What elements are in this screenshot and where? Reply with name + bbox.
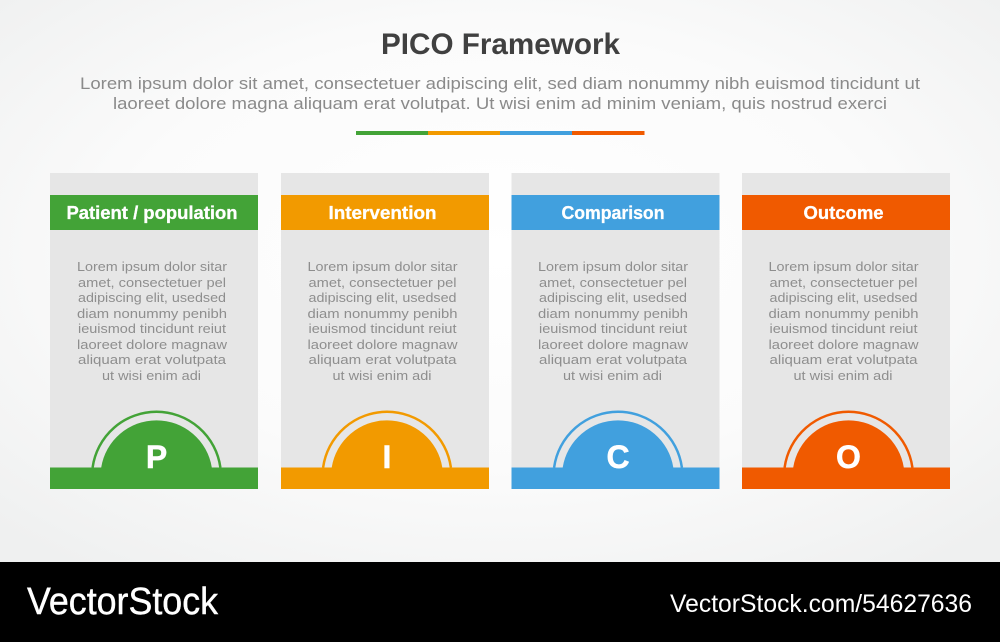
badge: O: O bbox=[836, 439, 861, 475]
panel: Comparison bbox=[512, 173, 720, 489]
body text: amet, consectetuer pel bbox=[308, 275, 457, 290]
header: Intervention bbox=[281, 195, 489, 230]
body text: ut wisi enim adi bbox=[102, 368, 201, 383]
body text: Lorem ipsum dolor sitar bbox=[308, 259, 458, 274]
header: Patient / population: Patient / population bbox=[66, 203, 238, 223]
badge: C bbox=[512, 412, 720, 489]
body text: ieuismod tincidunt reiut bbox=[308, 321, 457, 336]
title underline in four colours bbox=[356, 131, 644, 135]
body text: ut wisi enim adi bbox=[794, 368, 893, 383]
header: Comparison bbox=[512, 195, 720, 230]
body text: amet, consectetuer pel bbox=[539, 275, 687, 290]
body text: ieuismod tincidunt reiut bbox=[78, 321, 226, 336]
body text: adipiscing elit, usedsed bbox=[78, 290, 226, 305]
footer image id: VectorStock.com/54627636 bbox=[670, 590, 972, 618]
body text: diam nonummy penibh bbox=[538, 306, 688, 321]
body text: Lorem ipsum dolor sitar bbox=[538, 259, 689, 274]
body text: adipiscing elit, usedsed bbox=[539, 290, 687, 305]
body text: laoreet dolore magnaw bbox=[538, 337, 689, 352]
body text: amet, consectetuer pel bbox=[770, 275, 918, 290]
header: Outcome bbox=[742, 195, 950, 230]
badge: P: P bbox=[146, 439, 167, 475]
body text bbox=[77, 259, 228, 383]
body text bbox=[308, 259, 458, 383]
header: Comparison: Comparison bbox=[562, 203, 664, 223]
body text: ut wisi enim adi bbox=[332, 368, 432, 383]
subtitle text: Lorem ipsum dolor sit amet, consectetuer adipiscing elit, sed diam nonummy nibh euismod tincidunt ut bbox=[80, 74, 920, 93]
header: Patient / population bbox=[50, 195, 258, 230]
header: Outcome: Outcome bbox=[804, 203, 884, 223]
body text: aliquam erat volutpata bbox=[770, 352, 918, 367]
body text bbox=[538, 259, 689, 383]
body text: adipiscing elit, usedsed bbox=[770, 290, 918, 305]
title: PICO Framework bbox=[381, 28, 620, 61]
body text: diam nonummy penibh bbox=[768, 306, 918, 321]
badge: C: C bbox=[606, 439, 630, 475]
body text: adipiscing elit, usedsed bbox=[308, 290, 456, 305]
body text: aliquam erat volutpata bbox=[308, 352, 457, 367]
badge: I bbox=[281, 412, 489, 489]
badge: P bbox=[50, 412, 258, 489]
body text: laoreet dolore magnaw bbox=[308, 337, 458, 352]
body text: diam nonummy penibh bbox=[308, 306, 458, 321]
footer bar bbox=[0, 562, 1000, 642]
panel: Patient / population bbox=[50, 173, 258, 489]
body text bbox=[768, 259, 919, 383]
body text: ieuismod tincidunt reiut bbox=[770, 321, 918, 336]
body text: ieuismod tincidunt reiut bbox=[539, 321, 687, 336]
body text: Lorem ipsum dolor sitar bbox=[77, 259, 228, 274]
badge: I: I bbox=[383, 439, 391, 475]
panel: Outcome bbox=[742, 173, 950, 489]
badge: O bbox=[742, 412, 950, 489]
body text: amet, consectetuer pel bbox=[78, 275, 226, 290]
subtitle text: laoreet dolore magna aliquam erat volutpat. Ut wisi enim ad minim veniam, quis nostrud exerci bbox=[113, 94, 887, 113]
body text: aliquam erat volutpata bbox=[78, 352, 227, 367]
subtitle text bbox=[80, 74, 920, 113]
body text: laoreet dolore magnaw bbox=[77, 337, 228, 352]
body text: laoreet dolore magnaw bbox=[768, 337, 919, 352]
body text: Lorem ipsum dolor sitar bbox=[768, 259, 919, 274]
body text: aliquam erat volutpata bbox=[539, 352, 688, 367]
body text: diam nonummy penibh bbox=[77, 306, 227, 321]
body text: ut wisi enim adi bbox=[563, 368, 662, 383]
footer logo text: VectorStock bbox=[27, 581, 219, 623]
header: Intervention: Intervention bbox=[328, 203, 436, 223]
panel: Intervention bbox=[281, 173, 489, 489]
